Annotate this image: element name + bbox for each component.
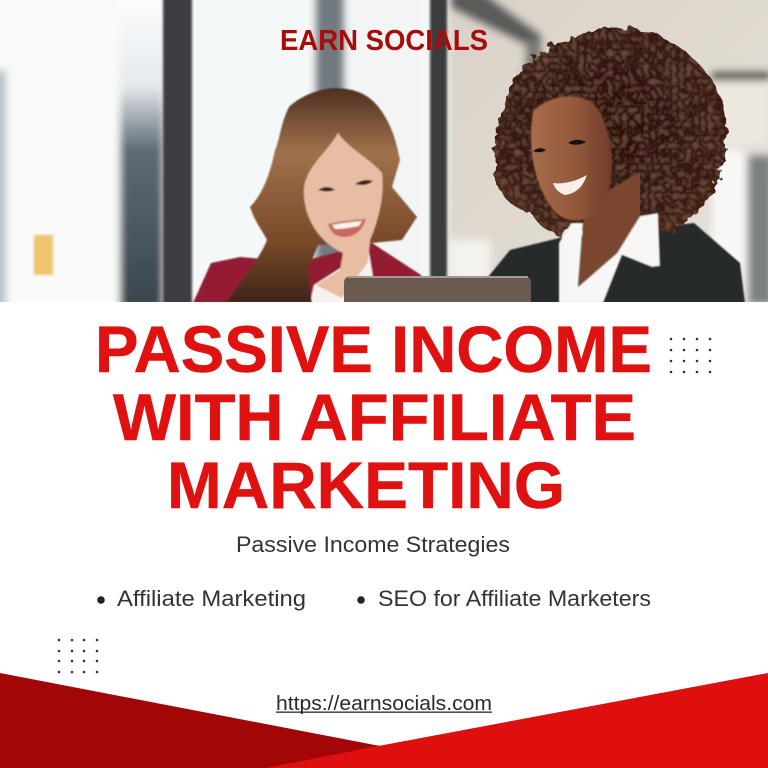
black blazer <box>488 223 745 303</box>
long brown hair <box>226 88 417 303</box>
eyes <box>318 180 373 192</box>
bullet: affiliate marketing: Affiliate Marketing <box>117 586 306 611</box>
white shirt <box>310 247 373 303</box>
dark window columns <box>34 0 447 305</box>
red blazer <box>193 243 425 303</box>
eyes <box>533 140 586 152</box>
smile <box>328 219 366 237</box>
dot pattern: bottom left <box>58 639 98 673</box>
dot pattern: top right <box>670 338 711 373</box>
website link: https://earnsocials.com <box>276 693 492 715</box>
woman in red blazer <box>193 88 425 303</box>
curly afro hair <box>494 28 726 235</box>
footer shape: dark red wedge <box>0 673 380 768</box>
bullet: SEO: SEO for Affiliate Marketers <box>378 586 651 611</box>
face and neck <box>304 133 383 298</box>
photo background: office windows <box>0 0 768 310</box>
smile <box>553 175 587 195</box>
subheading: Passive Income Strategies <box>236 532 510 557</box>
brand heading: EARN SOCIALS <box>280 25 488 57</box>
laptop <box>344 276 531 303</box>
photo: two women looking at a laptop <box>0 0 768 310</box>
main title: WITH AFFILIATE <box>113 380 636 454</box>
neck <box>578 172 640 287</box>
white shirt collar <box>559 213 660 303</box>
main title: PASSIVE INCOME <box>95 312 652 386</box>
main title <box>95 312 652 522</box>
woman in black blazer <box>488 28 745 303</box>
face <box>531 96 612 220</box>
main title: MARKETING <box>167 448 565 522</box>
footer shape: bright red wedge <box>266 673 768 768</box>
